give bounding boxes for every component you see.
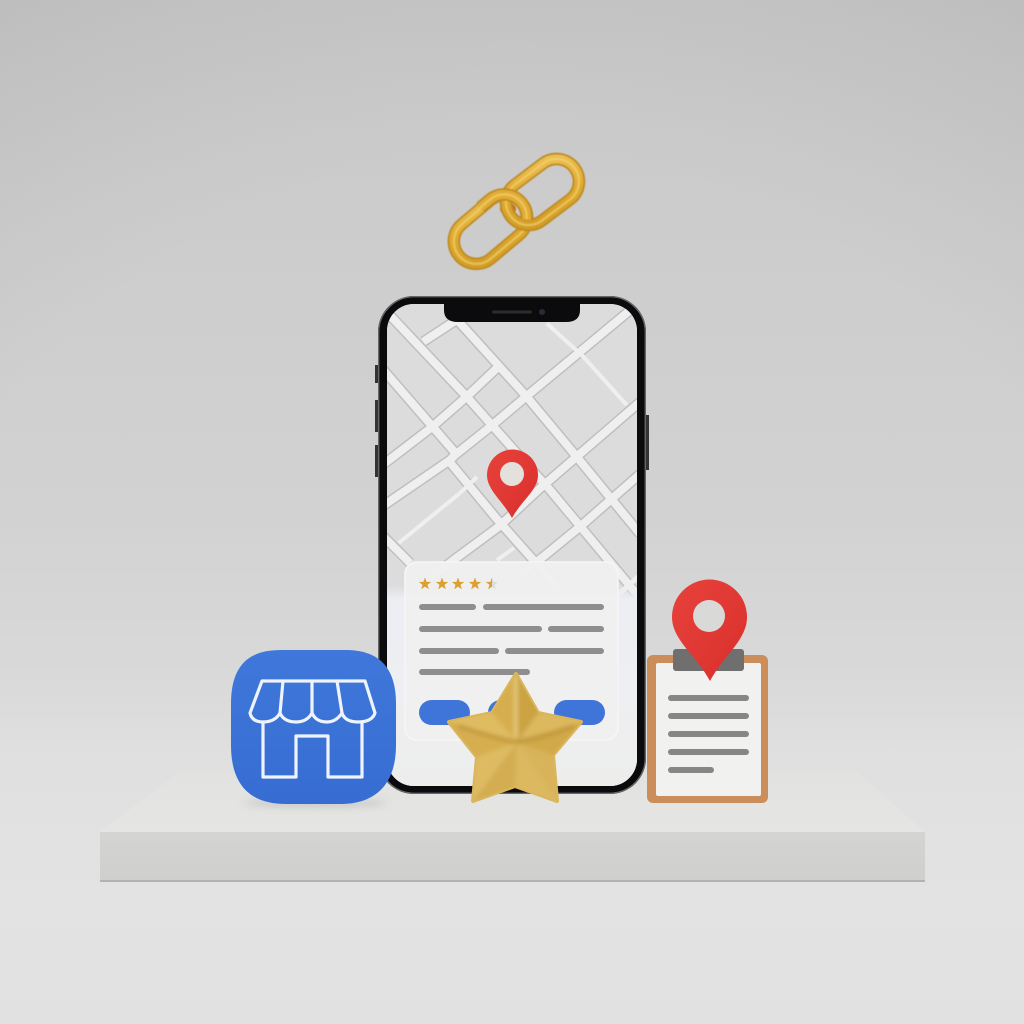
notch [444, 303, 580, 322]
crossing shade [500, 203, 516, 215]
map on phone screen [380, 302, 640, 786]
map location pin [487, 450, 538, 518]
gold chain link icon [445, 150, 588, 273]
review card [405, 562, 618, 740]
lower link [445, 186, 536, 273]
marble platform [100, 773, 925, 882]
star rating [419, 578, 498, 589]
lower link front arch [480, 194, 527, 219]
card buttons [419, 700, 605, 725]
clipboard pin [672, 580, 747, 681]
review text lines [419, 604, 604, 675]
blue store app icon [231, 650, 396, 807]
clipboard with location pin [647, 580, 768, 803]
road surfaces [380, 302, 640, 598]
smartphone [375, 296, 649, 794]
upper link [497, 150, 588, 234]
gold star [445, 670, 585, 805]
road edges [380, 302, 640, 598]
